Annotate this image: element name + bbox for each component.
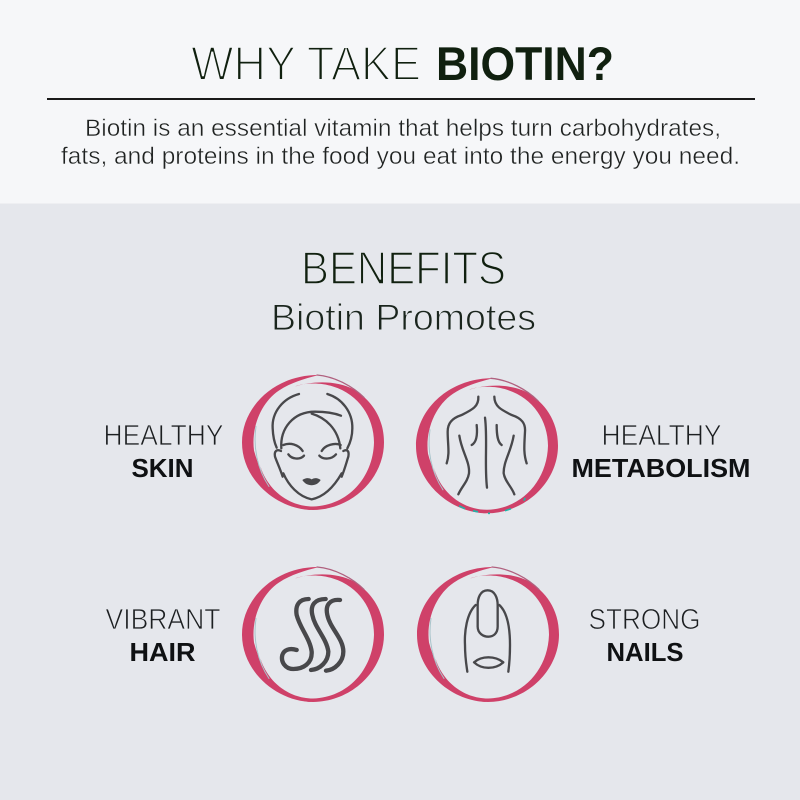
intro text: fats, and proteins in the food you eat into the energy you need. <box>61 143 740 170</box>
label: strong nails <box>588 604 700 667</box>
label: healthy skin: HEALTHY <box>104 420 224 452</box>
label: healthy skin: SKIN <box>132 453 194 483</box>
icon: hair in ring <box>242 567 384 702</box>
icon: nail in ring <box>417 567 559 702</box>
panel: intro header <box>0 0 800 204</box>
benefit: vibrant hair <box>106 567 384 702</box>
label: strong nails: NAILS <box>606 637 684 667</box>
label: healthy metabolism <box>572 420 750 483</box>
icon: back in ring <box>416 378 558 513</box>
benefit: healthy skin <box>104 375 384 510</box>
panel: benefits heading: Biotin Promotes <box>271 297 536 338</box>
label: healthy metabolism: HEALTHY <box>602 420 722 452</box>
title <box>191 37 614 91</box>
label: strong nails: STRONG <box>588 604 700 636</box>
panel: benefits heading <box>271 242 536 338</box>
benefit: strong nails <box>417 567 700 702</box>
title: WHY TAKE <box>191 37 421 91</box>
intro text <box>61 115 740 170</box>
label: vibrant hair: HAIR <box>130 637 196 667</box>
panel: benefits heading: BENEFITS <box>301 242 506 294</box>
intro text: Biotin is an essential vitamin that helps turn carbohydrates, <box>85 115 721 142</box>
label: healthy skin <box>104 420 224 483</box>
title: BIOTIN? <box>436 38 614 91</box>
icon: face in ring <box>242 375 384 510</box>
label: vibrant hair: VIBRANT <box>106 604 220 636</box>
label: vibrant hair <box>106 604 220 667</box>
label: healthy metabolism: METABOLISM <box>572 453 750 483</box>
benefit: healthy metabolism <box>416 378 750 513</box>
